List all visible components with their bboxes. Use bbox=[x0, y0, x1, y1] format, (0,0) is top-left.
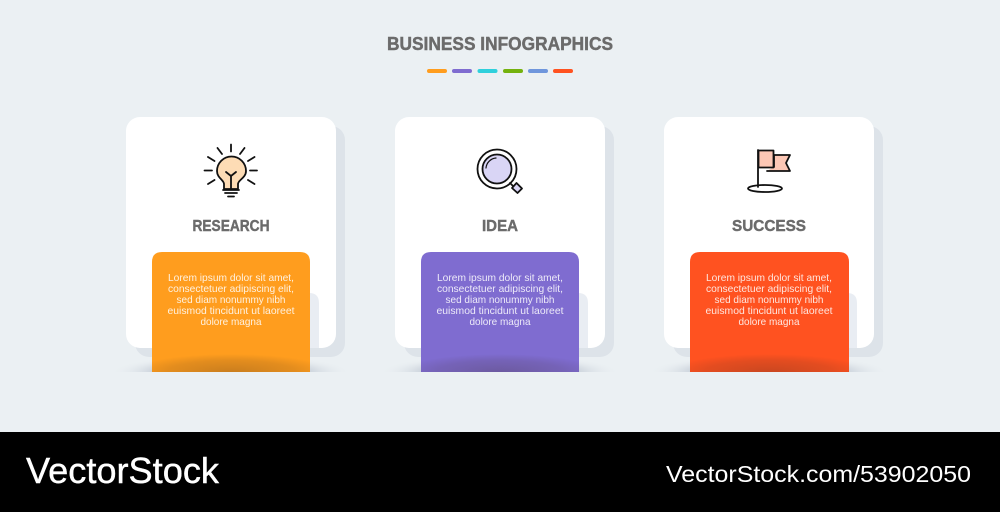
body text: dolore magna bbox=[738, 316, 800, 328]
brand name: VectorStock bbox=[26, 450, 220, 491]
colour dash legend bbox=[427, 69, 573, 73]
inner tab shadow bbox=[300, 293, 319, 348]
card bbox=[395, 117, 605, 348]
body text bbox=[706, 272, 833, 328]
inner tab shadow bbox=[838, 293, 857, 348]
body text bbox=[436, 272, 564, 328]
body text bbox=[168, 272, 295, 328]
tab shade bbox=[690, 356, 849, 372]
panel: research bbox=[126, 117, 345, 372]
ground shadow bbox=[402, 364, 598, 372]
body text: euismod tincidunt ut laoreet bbox=[436, 305, 564, 317]
body text: Lorem ipsum dolor sit amet, bbox=[706, 272, 832, 284]
panel: idea bbox=[395, 117, 614, 372]
image url: VectorStock.com/53902050 bbox=[666, 461, 971, 487]
body text: Lorem ipsum dolor sit amet, bbox=[168, 272, 294, 284]
heading: RESEARCH bbox=[192, 218, 270, 235]
tab shade bbox=[152, 356, 310, 372]
icon: light bulb bbox=[204, 144, 257, 196]
body text: euismod tincidunt ut laoreet bbox=[706, 305, 833, 317]
heading: SUCCESS bbox=[732, 218, 806, 235]
body text: consectetuer adipiscing elit, bbox=[168, 283, 294, 295]
body text: Lorem ipsum dolor sit amet, bbox=[437, 272, 563, 284]
inner tab shadow bbox=[569, 293, 588, 348]
card bbox=[126, 117, 336, 348]
body text: sed diam nonummy nibh bbox=[446, 294, 555, 306]
card shadow bbox=[135, 126, 345, 357]
panel: success bbox=[664, 117, 883, 372]
body text: consectetuer adipiscing elit, bbox=[706, 283, 832, 295]
tab shade bbox=[421, 356, 579, 372]
icon: flag bbox=[748, 150, 790, 192]
body text: sed diam nonummy nibh bbox=[714, 294, 824, 306]
footer bar bbox=[0, 432, 1000, 512]
orange tab bbox=[152, 252, 310, 372]
heading: IDEA bbox=[482, 218, 518, 235]
title: BUSINESS INFOGRAPHICS bbox=[387, 33, 613, 54]
red tab bbox=[690, 252, 849, 372]
ground shadow bbox=[133, 364, 328, 372]
card shadow bbox=[404, 126, 614, 357]
card shadow bbox=[673, 126, 883, 357]
body text: sed diam nonummy nibh bbox=[176, 294, 286, 306]
body text: consectetuer adipiscing elit, bbox=[437, 283, 563, 295]
body text: dolore magna bbox=[200, 316, 262, 328]
icon: magnifying glass bbox=[478, 150, 522, 193]
purple tab bbox=[421, 252, 579, 372]
body text: dolore magna bbox=[470, 316, 531, 328]
ground shadow bbox=[671, 364, 867, 372]
body text: euismod tincidunt ut laoreet bbox=[168, 305, 295, 317]
card bbox=[664, 117, 874, 348]
